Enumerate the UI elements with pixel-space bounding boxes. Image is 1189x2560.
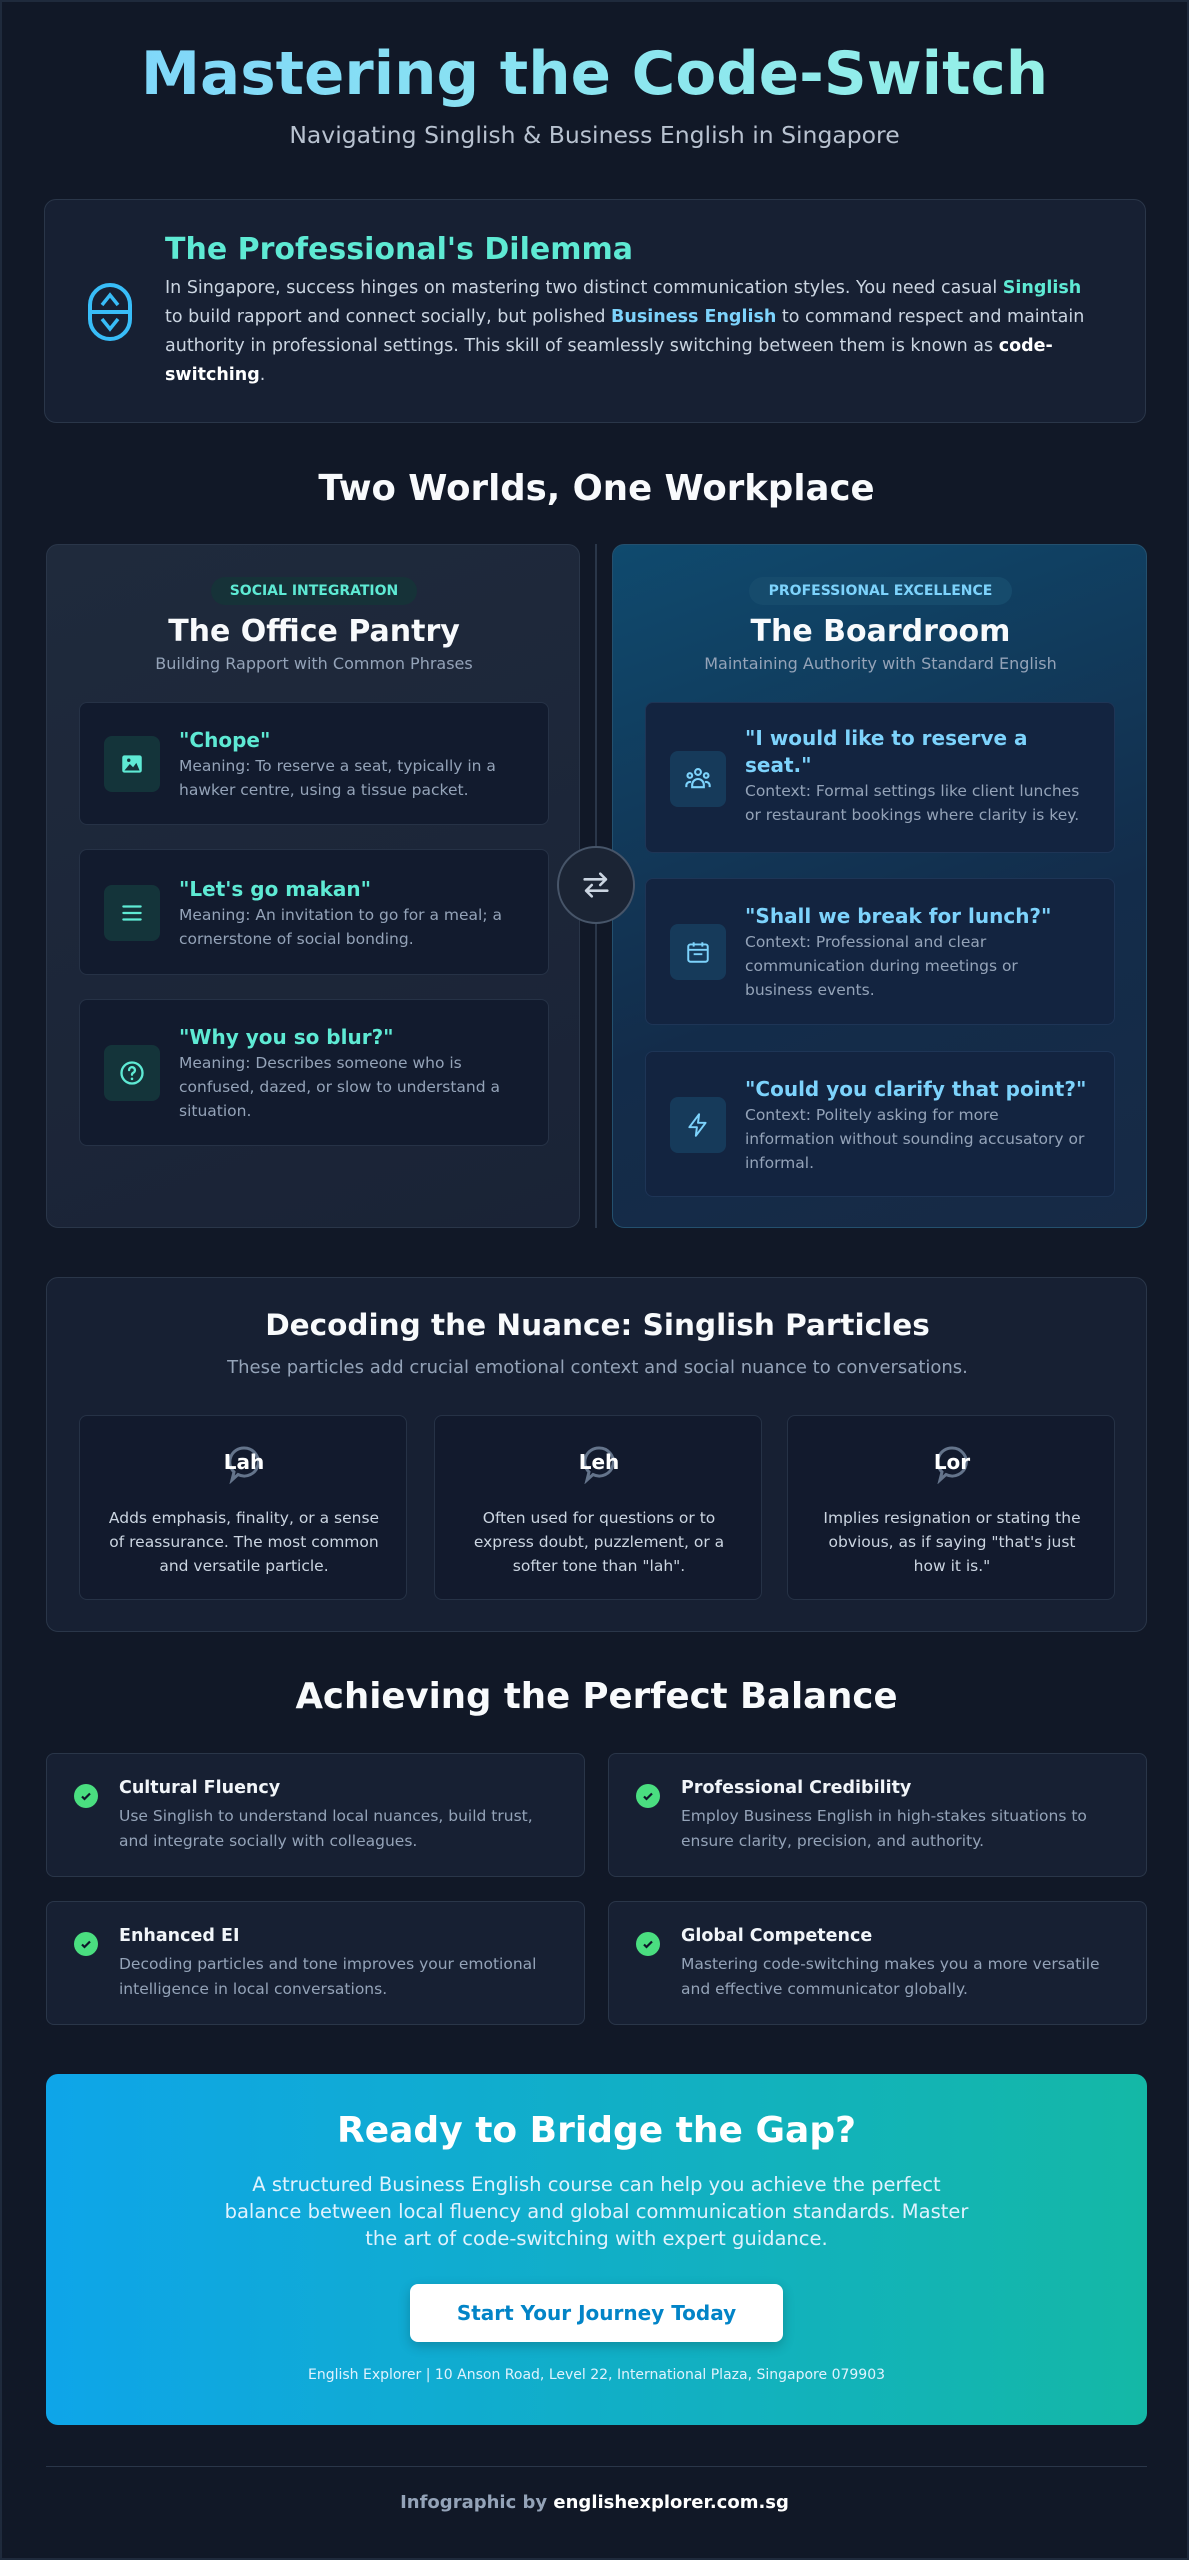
subtitle: Navigating Singlish & Business English in Singapore: [289, 121, 900, 149]
panel: boardroom: [612, 544, 1147, 1228]
badge: [749, 577, 1012, 605]
benefit: cultural fluency: [46, 1753, 585, 1877]
panel title: The Office Pantry: [168, 614, 460, 649]
badge: [211, 577, 417, 605]
icon: menu: [104, 885, 160, 941]
cta heading: Ready to Bridge the Gap?: [337, 2110, 856, 2151]
item: lunch: "Shall we break for lunch?": [745, 904, 1051, 928]
panel: dilemma: [44, 199, 1146, 423]
divider line: [595, 544, 597, 1228]
heading: The Professional's Dilemma: [165, 232, 633, 267]
panel subtitle: Building Rapport with Common Phrases: [155, 654, 473, 673]
item: chope: Meaning: To reserve a seat, typically in a hawker centre, using a tissue packet.: [179, 757, 496, 799]
benefit: global competence: Global Competence: [681, 1926, 872, 1946]
item: chope: "Chope": [179, 728, 270, 752]
item: clarify: Context: Politely asking for more information without sounding accusatory or informal.: [745, 1106, 1084, 1172]
cta body: A structured Business English course can help you achieve the perfect balance between local fluency and global communication standards. Master the art of code-switching with expert guidance.: [225, 2173, 968, 2250]
icon: chat with word: [579, 1446, 619, 1484]
benefit: enhanced EI: Decoding particles and tone improves your emotional intelligence in local conversations.: [119, 1955, 536, 1998]
item: clarify: "Could you clarify that point?": [745, 1077, 1086, 1101]
footer: Infographic by englishexplorer.com.sg: [400, 2492, 789, 2513]
benefit: professional credibility: [608, 1753, 1147, 1877]
panel title: The Boardroom: [751, 614, 1010, 649]
address: English Explorer | 10 Anson Road, Level 22, International Plaza, Singapore 079903: [308, 2367, 885, 2383]
icon: people: [670, 751, 726, 807]
icon: bolt: [670, 1097, 726, 1153]
badge: PROFESSIONAL EXCELLENCE: [769, 583, 992, 599]
icon: chat with word: [224, 1446, 264, 1484]
icon: calendar: [670, 924, 726, 980]
icon: chat with word: Leh: [579, 1450, 619, 1474]
heading: balance: Achieving the Perfect Balance: [295, 1676, 898, 1717]
item: reserve: Context: Formal settings like client lunches or restaurant bookings where clarity is key.: [745, 782, 1079, 824]
particle: lor: Implies resignation or stating the obvious, as if saying "that's just how it is.": [823, 1509, 1081, 1575]
icon: image: [104, 736, 160, 792]
icon: swap arrows: [557, 846, 635, 924]
item: makan: "Let's go makan": [179, 877, 371, 901]
item: makan: [79, 849, 549, 975]
particle: leh: Often used for questions or to express doubt, puzzlement, or a softer tone than "lah".: [474, 1509, 724, 1575]
benefit: professional credibility: Professional Credibility: [681, 1778, 911, 1798]
heading: two worlds: Two Worlds, One Workplace: [318, 468, 875, 509]
particle: lah: Adds emphasis, finality, or a sense of reassurance. The most common and versatile particle.: [109, 1509, 379, 1575]
button: [410, 2284, 783, 2342]
icon: chat with word: [934, 1446, 970, 1484]
particle: lah: [79, 1415, 407, 1600]
benefit: global competence: [608, 1901, 1147, 2025]
item: lunch: Context: Professional and clear communication during meetings or business events.: [745, 933, 1018, 999]
icon: check: [74, 1932, 98, 1956]
particle: leh: [434, 1415, 762, 1600]
panel subtitle: Maintaining Authority with Standard English: [704, 654, 1057, 673]
benefit: cultural fluency: Cultural Fluency: [119, 1778, 280, 1798]
item: lunch: [645, 878, 1115, 1025]
benefit: enhanced EI: [46, 1901, 585, 2025]
item: reserve: "I would like to reserve a seat.": [745, 726, 1028, 777]
button: Start Your Journey Today: [457, 2301, 736, 2325]
item: reserve: [645, 702, 1115, 853]
heading: Decoding the Nuance: Singlish Particles: [265, 1308, 930, 1342]
benefit: professional credibility: Employ Business English in high-stakes situations to ensure clarity, precision, and authority.: [681, 1807, 1087, 1850]
icon: chat with word: Lor: [934, 1450, 970, 1474]
item: clarify: [645, 1051, 1115, 1197]
icon: question: [104, 1045, 160, 1101]
subtitle: These particles add crucial emotional context and social nuance to conversations.: [227, 1357, 968, 1378]
benefit: global competence: Mastering code-switching makes you a more versatile and effective communicator globally.: [681, 1955, 1100, 1998]
icon: check: [636, 1932, 660, 1956]
particle: lor: [787, 1415, 1115, 1600]
body text: In Singapore, success hinges on mastering two distinct communication styles. You need casual Singlish to build rapport and connect socially, but polished Business English to command respect and maintain authority in professional settings. This skill of seamlessly switching between them is known as code-switching.: [165, 278, 1084, 385]
icon: switch capsule: [88, 283, 132, 341]
badge: SOCIAL INTEGRATION: [230, 583, 398, 599]
panel: office pantry: [46, 544, 580, 1228]
item: blur: Meaning: Describes someone who is confused, dazed, or slow to understand a situation.: [179, 1054, 500, 1120]
item: makan: Meaning: An invitation to go for a meal; a cornerstone of social bonding.: [179, 906, 502, 948]
item: chope: [79, 702, 549, 825]
icon: check: [74, 1784, 98, 1808]
panel: particles: [46, 1277, 1147, 1632]
benefit: cultural fluency: Use Singlish to understand local nuances, build trust, and integrate socially with colleagues.: [119, 1807, 533, 1850]
title: Mastering the Code-Switch: [141, 40, 1048, 109]
panel: call to action: [46, 2074, 1147, 2425]
icon: check: [636, 1784, 660, 1808]
icon: chat with word: Lah: [224, 1450, 264, 1474]
benefit: enhanced EI: Enhanced EI: [119, 1926, 239, 1946]
item: blur: [79, 999, 549, 1146]
item: blur: "Why you so blur?": [179, 1025, 394, 1049]
